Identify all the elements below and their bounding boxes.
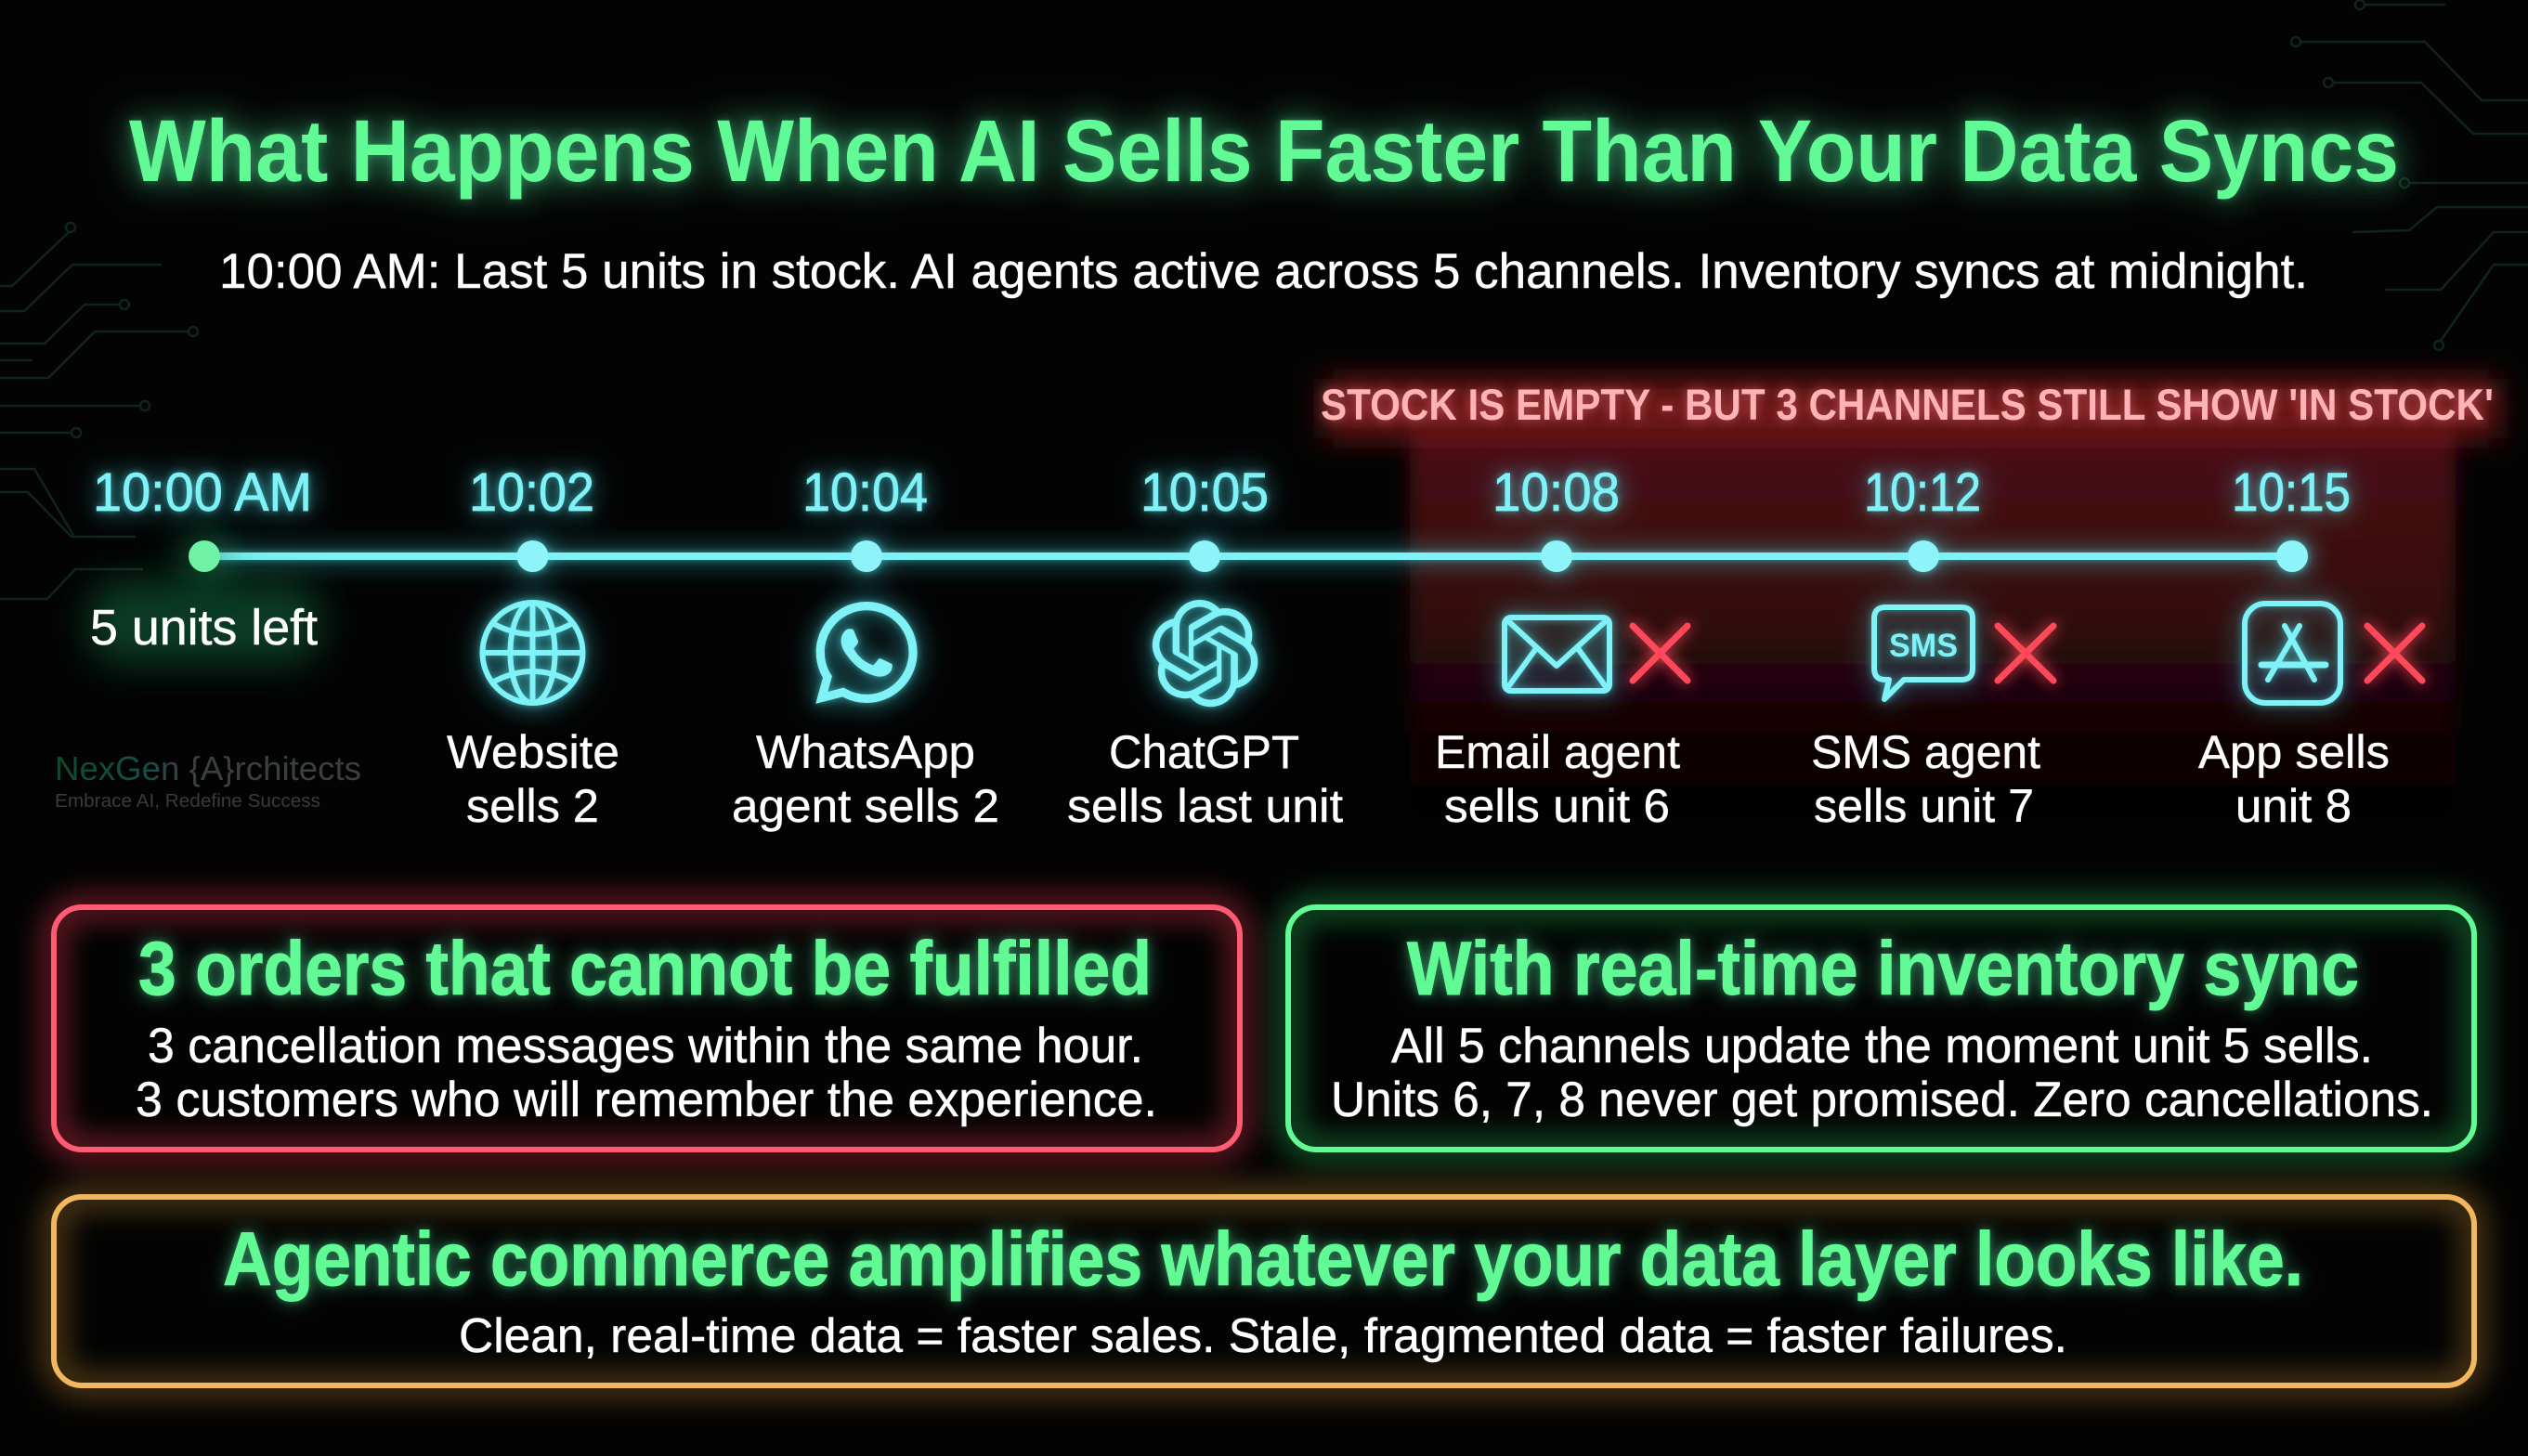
channel labels: WhatsApp [756,726,975,778]
time labels: 10:05 [1140,462,1269,523]
title: What Happens When AI Sells Faster Than Your Data Syncs [129,102,2399,201]
timeline [93,462,2351,572]
circuit decoration: right [2291,0,2528,350]
body text: 3 customers who will remember the experience. [136,1072,1157,1127]
body text [136,1019,1157,1127]
time labels: 10:00 AM [93,462,312,523]
channel labels: sells last unit [1067,780,1343,832]
channel labels: ChatGPT [1109,726,1299,778]
time labels [93,462,2351,523]
timeline line and nodes [204,540,2308,572]
panel: red danger zone [1323,379,2498,817]
subtitle: 10:00 AM: Last 5 units in stock. AI agents active across 5 channels. Inventory syncs at midnight. [219,244,2308,299]
panel: conclusion [54,1197,2474,1385]
heading: Agentic commerce amplifies whatever your data layer looks like. [223,1217,2303,1302]
channel labels: agent sells 2 [732,780,999,832]
logo: NexGen Architects [55,749,361,812]
icon: sms bubble [1874,607,1973,699]
time labels: 10:08 [1492,462,1620,523]
time labels: 10:15 [2232,462,2351,523]
body text: Clean, real-time data = faster sales. Stale, fragmented data = faster failures. [459,1309,2067,1363]
body text: 3 cancellation messages within the same hour. [148,1019,1143,1073]
icon: globe [483,603,583,703]
start node: 5 units left: 5 units left [90,600,318,656]
body text: All 5 channels update the moment unit 5 sells. [1391,1019,2373,1073]
icon: whatsapp [815,602,918,704]
circuit decoration: left [0,223,198,599]
channel labels: unit 8 [2235,780,2352,832]
body text [1331,1019,2433,1127]
time labels: 10:12 [1864,462,1981,523]
start node: 5 units left [88,532,320,664]
icon: email envelope [1505,618,1609,691]
channel labels: App sells [2198,726,2390,778]
channel labels: Website [447,726,619,778]
body text: Units 6, 7, 8 never get promised. Zero cancellations. [1331,1072,2433,1127]
channel labels: sells unit 6 [1444,780,1670,832]
time labels: 10:04 [802,462,928,523]
logo: NexGen Architects: NexGen {A}rchitects [55,749,361,787]
time labels: 10:02 [469,462,594,523]
panel: orders that cannot be fulfilled [54,907,1240,1150]
panel: with real-time inventory sync [1288,907,2474,1150]
icon: chatgpt knot [1153,600,1257,707]
heading: 3 orders that cannot be fulfilled [138,927,1152,1011]
icon: red x marks [1633,626,2422,681]
icon: app store [2245,604,2340,703]
logo: NexGen Architects: Embrace AI, Redefine Success [55,791,320,812]
channel labels: SMS agent [1811,726,2040,778]
channel labels: sells 2 [466,780,599,832]
channel labels [447,726,2390,832]
channel labels: Email agent [1435,726,1680,778]
icon: sms bubble: SMS [1889,628,1958,664]
channel labels: sells unit 7 [1814,780,2034,832]
heading: With real-time inventory sync [1407,927,2359,1011]
